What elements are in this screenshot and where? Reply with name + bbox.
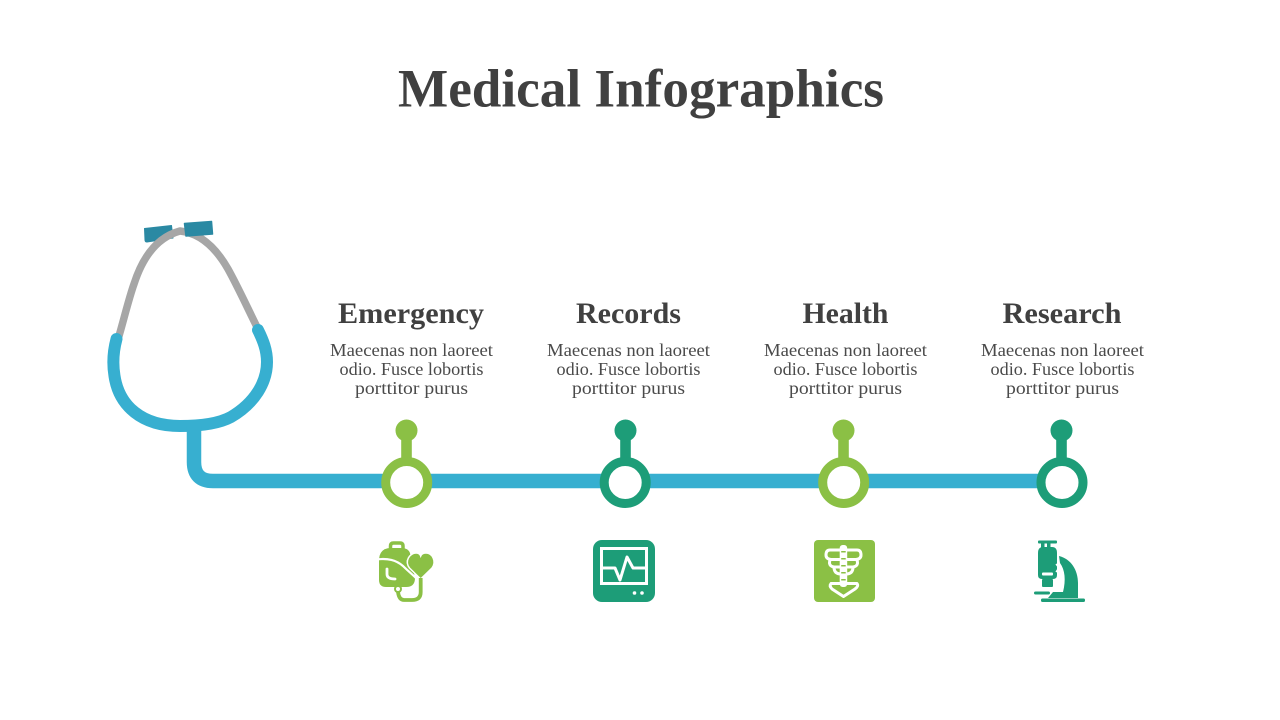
step: Research (981, 297, 1144, 602)
description: odio. Fusce lobortis (990, 359, 1135, 379)
icon: IV bag with heart (376, 543, 434, 600)
marker (386, 420, 428, 504)
description: porttitor purus (789, 378, 902, 398)
title: Medical Infographics (398, 58, 884, 118)
heading: Records (576, 297, 681, 330)
step: Records (547, 297, 710, 602)
description (981, 340, 1144, 398)
left earpiece (144, 226, 173, 242)
stethoscope (113, 222, 1062, 481)
description: porttitor purus (1006, 378, 1119, 398)
step: Health (764, 297, 927, 602)
description: odio. Fusce lobortis (340, 359, 484, 379)
heading: Research (1002, 297, 1122, 330)
description: Maecenas non laoreet (981, 340, 1144, 360)
marker (1041, 420, 1083, 504)
description (764, 340, 927, 398)
icon: x-ray ribcage (814, 540, 875, 602)
heading: Health (802, 297, 889, 330)
stethoscope blue tube (113, 330, 267, 426)
description: odio. Fusce lobortis (556, 359, 701, 379)
heading: Emergency (338, 297, 484, 330)
stethoscope grey headset tube (119, 231, 258, 336)
description: porttitor purus (355, 378, 468, 398)
icon: microscope (1034, 540, 1085, 602)
timeline tube (194, 426, 1062, 481)
description: Maecenas non laoreet (330, 340, 493, 360)
marker (823, 420, 865, 504)
description: odio. Fusce lobortis (774, 359, 918, 379)
description: Maecenas non laoreet (764, 340, 927, 360)
icon: heart monitor (593, 540, 655, 602)
right earpiece (184, 222, 212, 236)
description: porttitor purus (572, 378, 685, 398)
description: Maecenas non laoreet (547, 340, 710, 360)
marker (604, 420, 646, 504)
description (547, 340, 710, 398)
description (330, 340, 493, 398)
step: Emergency (330, 297, 493, 600)
